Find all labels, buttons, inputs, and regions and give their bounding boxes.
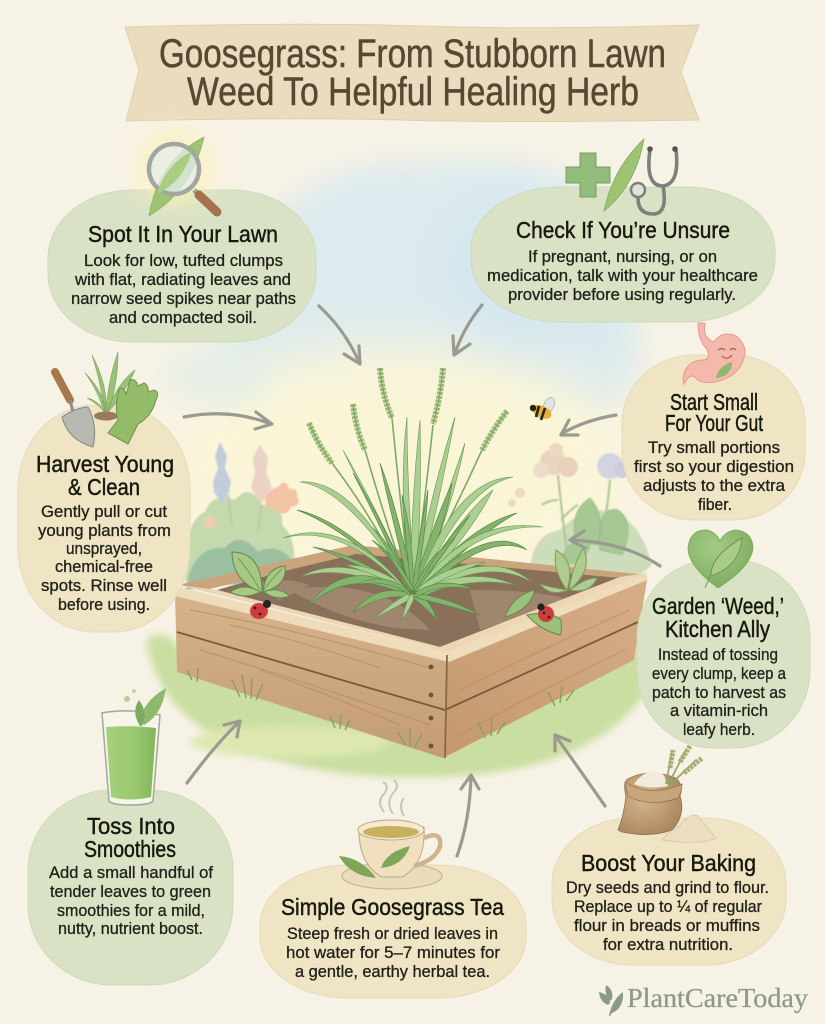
icon: stomach with face xyxy=(683,323,745,384)
arrow from Garden xyxy=(570,531,660,566)
body text: tender leaves to green xyxy=(50,882,211,901)
icon: cross, leaf and stethoscope xyxy=(566,139,678,214)
side blades xyxy=(300,482,413,592)
body text: first so your digestion xyxy=(634,457,794,476)
panel: harvest young and clean xyxy=(18,352,190,632)
body text: Dry seeds and grind to flour. xyxy=(566,878,769,897)
heading: Simple Goosegrass Tea xyxy=(281,894,504,920)
leaf on bed edge xyxy=(505,590,561,635)
body text: narrow seed spikes near paths xyxy=(71,289,296,308)
panel: simple goosegrass tea xyxy=(260,780,526,998)
title text: Weed To Helpful Healing Herb xyxy=(187,70,639,114)
arrow from Spot It xyxy=(319,306,360,364)
arrow from Start Small xyxy=(561,415,616,435)
heading: Start Small xyxy=(670,389,758,415)
icon: logo leaves xyxy=(599,985,623,1016)
grass tufts xyxy=(187,668,574,747)
flower stems xyxy=(332,418,482,585)
panel: start small for your gut xyxy=(622,323,805,520)
plank seams xyxy=(177,632,445,710)
body text: Add a small handful of xyxy=(49,863,213,882)
body text: with flat, radiating leaves and xyxy=(74,270,291,289)
body text: flour in breads or muffins xyxy=(574,916,760,935)
heading: Smoothies xyxy=(84,836,176,862)
heading: For Your Gut xyxy=(665,410,763,436)
body text: chemical-free xyxy=(55,557,153,576)
body text: provider before using regularly. xyxy=(508,285,736,304)
panel: garden weed kitchen ally xyxy=(637,530,810,748)
garden illustration xyxy=(146,368,652,778)
body text: patch to harvest as xyxy=(652,683,786,702)
grass under the bed xyxy=(146,634,650,778)
body text: medication, talk with your healthcare xyxy=(487,266,758,285)
right face xyxy=(443,580,647,758)
icon: magnifier with leaf xyxy=(141,134,217,216)
heading: & Clean xyxy=(68,474,140,500)
heading: Toss Into xyxy=(87,813,175,839)
body text: smoothies for a mild, xyxy=(57,901,205,920)
icon: tea cup with leaves xyxy=(339,780,442,889)
body text: hot water for 5–7 minutes for xyxy=(286,943,500,962)
body text: a gentle, earthy herbal tea. xyxy=(295,962,490,981)
icon: sack of flour and seed stalks xyxy=(618,746,716,843)
ladybug right xyxy=(537,603,554,622)
arrow from Baking xyxy=(555,735,605,806)
arrow from Check xyxy=(453,305,482,355)
heading: Boost Your Baking xyxy=(581,850,756,876)
body text: Look for low, tufted clumps xyxy=(84,251,283,270)
raised bed xyxy=(175,545,647,758)
background plants and flowers right xyxy=(508,443,652,575)
seed spikes xyxy=(309,368,507,463)
logo: PlantCareToday: PlantCareToday xyxy=(627,983,809,1013)
arrow from Smoothies xyxy=(187,721,240,783)
title banner xyxy=(125,24,699,122)
background plants and flowers left xyxy=(186,442,299,590)
arrows xyxy=(184,305,660,856)
arrow from Harvest xyxy=(184,412,272,429)
body text: Steep fresh or dried leaves in xyxy=(287,924,498,943)
body text: every clump, keep a xyxy=(652,664,786,683)
icon: heart with leaf xyxy=(688,530,753,588)
body text: spots. Rinse well xyxy=(41,576,167,595)
arrow from Tea xyxy=(457,775,479,856)
icon: green smoothie glass xyxy=(102,688,166,805)
body text: leafy herb. xyxy=(683,720,755,739)
body text: nutty, nutrient boost. xyxy=(58,919,203,938)
panel: toss into smoothies xyxy=(28,688,233,985)
heading: Check If You’re Unsure xyxy=(516,217,730,243)
upright blades xyxy=(343,450,414,590)
body text: young plants from xyxy=(38,521,171,540)
rim xyxy=(175,573,647,662)
body text: for extra nutrition. xyxy=(603,935,733,954)
icon: trowel, seedling and glove xyxy=(55,352,158,447)
heading: Kitchen Ally xyxy=(665,616,770,642)
body text: and compacted soil. xyxy=(109,308,257,327)
body text: If pregnant, nursing, or on xyxy=(528,247,717,266)
body text: a vitamin-rich xyxy=(670,701,768,720)
body text: Try small portions xyxy=(648,438,780,457)
panel: boost your baking xyxy=(552,746,786,965)
heading: Garden ‘Weed,’ xyxy=(652,593,784,619)
body text: fiber. xyxy=(698,495,732,514)
back rails xyxy=(178,545,360,590)
watercolor backdrop xyxy=(165,161,636,595)
body text: adjusts to the extra xyxy=(643,476,786,495)
body text: Instead of tossing xyxy=(658,645,778,664)
heading: Harvest Young xyxy=(36,451,174,477)
title text: Goosegrass: From Stubborn Lawn xyxy=(159,32,666,76)
small seedling right xyxy=(540,548,597,592)
body text: unsprayed, xyxy=(66,539,142,558)
body text: Replace up to ¼ of regular xyxy=(574,897,762,916)
body text: before using. xyxy=(58,595,150,614)
panel: spot it in your lawn xyxy=(48,134,316,342)
goosegrass plant xyxy=(283,368,543,620)
front left face xyxy=(175,594,447,758)
small seedling left xyxy=(230,552,290,598)
ladybug left xyxy=(250,600,271,619)
body text: Gently pull or cut xyxy=(41,502,167,521)
soil xyxy=(217,553,620,647)
bee xyxy=(530,396,557,422)
panel: check if you're unsure xyxy=(471,139,775,322)
heading: Spot It In Your Lawn xyxy=(88,221,278,247)
